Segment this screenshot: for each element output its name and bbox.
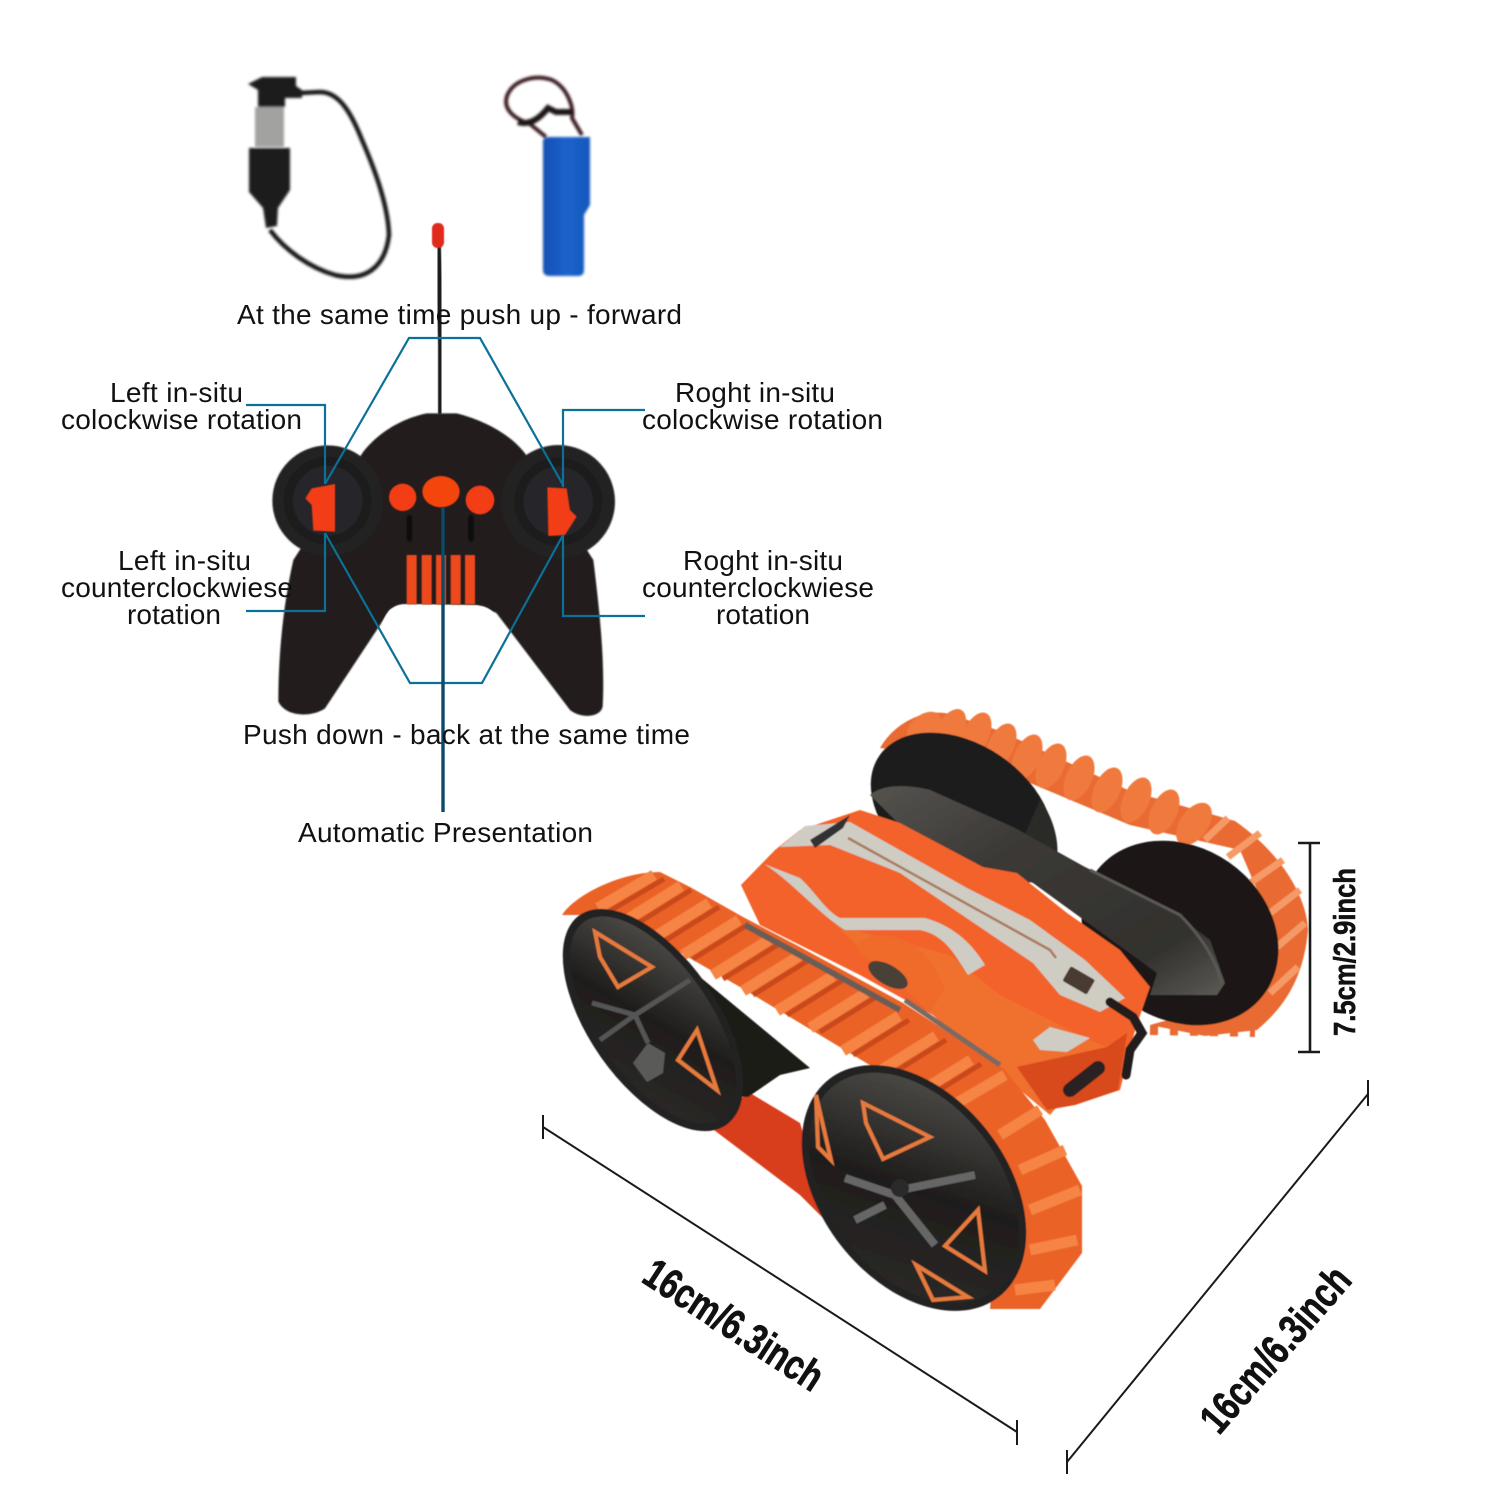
- label: right clockwise: Roght in-situ: [675, 377, 835, 408]
- label: right counterclockwise: counterclockwiese: [642, 572, 874, 603]
- label: side length: 16cm/6.3inch: [1190, 1256, 1360, 1442]
- label: right clockwise: [642, 377, 883, 435]
- axle: [870, 786, 1225, 995]
- label: left clockwise: [61, 377, 302, 435]
- white arch: [382, 604, 513, 682]
- chassis under track: [665, 948, 810, 1097]
- rear right disc: [1045, 803, 1315, 1063]
- controller antenna: [438, 246, 441, 414]
- label: automatic presentation: Automatic Presentation: [298, 817, 593, 848]
- antenna tip: [432, 223, 444, 248]
- side hump: [855, 935, 945, 1012]
- label: back: Push down - back at the same time: [243, 719, 690, 750]
- label: left counterclockwise: counterclockwiese: [61, 572, 293, 603]
- body stripe: [780, 822, 1125, 1012]
- label: right counterclockwise: [642, 545, 874, 630]
- right stick: [547, 487, 577, 536]
- dimension: side length: [1067, 1080, 1368, 1474]
- left grip: [272, 445, 383, 556]
- icon: remote controller: [272, 223, 615, 716]
- rear track: [841, 700, 1315, 1063]
- center button: [422, 476, 460, 507]
- right grip: [502, 445, 615, 558]
- charging port: [1070, 1068, 1098, 1090]
- red link under car: [693, 1093, 867, 1255]
- left stick: [305, 484, 335, 532]
- label: left clockwise: Left in-situ: [110, 377, 243, 408]
- label: forward: At the same time push up - forward: [237, 299, 682, 330]
- icon: USB charging cable: [248, 77, 389, 277]
- switch: [1062, 966, 1095, 995]
- front track: [527, 872, 1082, 1354]
- label: left counterclockwise: [61, 545, 293, 630]
- label: right counterclockwise: Roght in-situ: [683, 545, 843, 576]
- controller body: [278, 413, 603, 716]
- image: orange stunt tank car: [527, 700, 1315, 1354]
- front left wheel: [527, 878, 779, 1162]
- right button: [466, 486, 494, 514]
- right wheel hub: [845, 1175, 975, 1245]
- left wheel hub: [633, 1043, 665, 1082]
- label: height: 7.5cm/2.9inch: [1327, 868, 1362, 1036]
- rear track teeth: [900, 704, 1219, 852]
- left button: [389, 484, 416, 511]
- icon: rechargeable battery: [506, 78, 590, 276]
- label: left clockwise: colockwise rotation: [61, 404, 302, 435]
- rear track curved ribs: [1205, 818, 1305, 993]
- label: front length: 16cm/6.3inch: [635, 1249, 833, 1400]
- label: left counterclockwise: Left in-situ: [118, 545, 251, 576]
- front face: [1017, 1033, 1127, 1110]
- label: right clockwise: colockwise rotation: [642, 404, 883, 435]
- front track ribs: [598, 875, 1080, 1290]
- bumper: [1110, 1002, 1142, 1075]
- rear left disc: [841, 700, 1083, 924]
- grille stripes: [407, 555, 475, 604]
- label: right counterclockwise: rotation: [716, 599, 810, 630]
- logo: [810, 815, 850, 848]
- label: left counterclockwise: rotation: [127, 599, 221, 630]
- dimension: front length: [543, 1115, 1017, 1445]
- callout lines: [246, 338, 645, 812]
- front right wheel: [756, 1022, 1072, 1354]
- dimension: height: [1298, 843, 1320, 1052]
- front track rib shadows: [608, 879, 981, 1099]
- car body: [741, 810, 1150, 1115]
